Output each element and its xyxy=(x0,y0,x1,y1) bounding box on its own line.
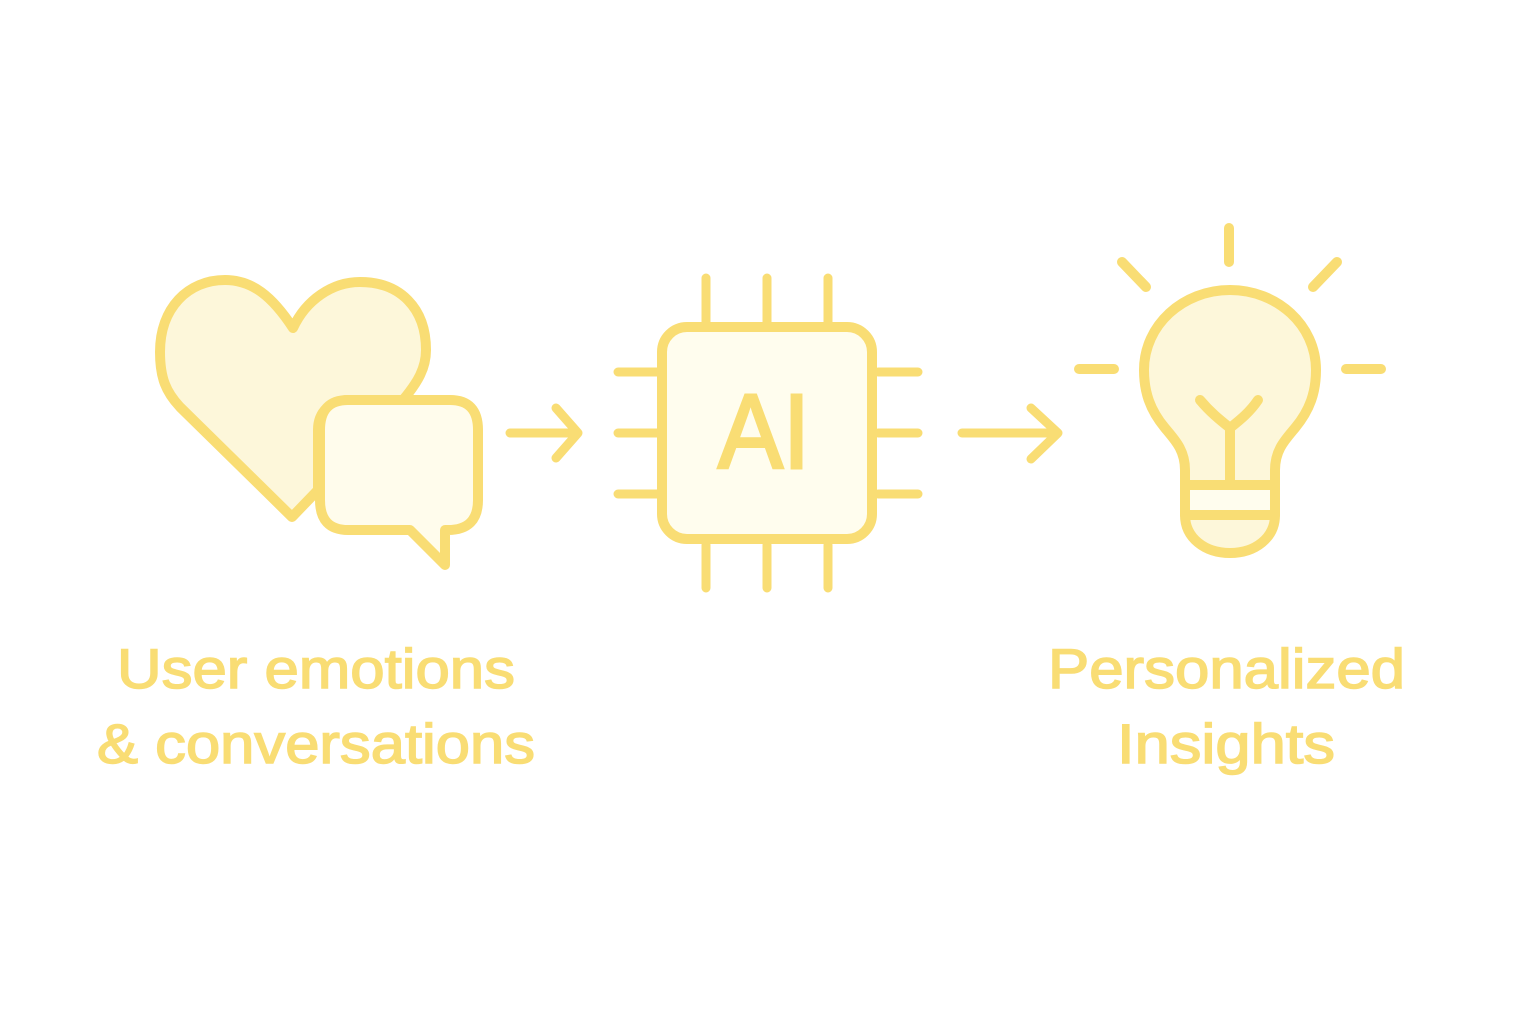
heart xyxy=(160,280,426,517)
rays xyxy=(1079,228,1381,369)
base xyxy=(1185,485,1275,515)
speech bubble xyxy=(320,400,478,565)
label: personalized insights xyxy=(1048,637,1405,775)
icon: heart with speech bubble xyxy=(160,280,478,565)
bulb glass xyxy=(1144,290,1316,485)
label: personalized insights: Personalized xyxy=(1048,637,1405,700)
icon: light bulb xyxy=(1079,228,1381,553)
filament xyxy=(1200,400,1258,485)
icon: AI chip xyxy=(618,278,918,588)
chip label: AI xyxy=(718,373,810,491)
label: personalized insights: Insights xyxy=(1117,712,1335,775)
label: user emotions: User emotions xyxy=(117,637,515,700)
arrow 2 xyxy=(962,408,1058,459)
label: user emotions xyxy=(97,637,535,775)
arrow 1 xyxy=(510,408,578,458)
label: user emotions: & conversations xyxy=(97,712,535,775)
